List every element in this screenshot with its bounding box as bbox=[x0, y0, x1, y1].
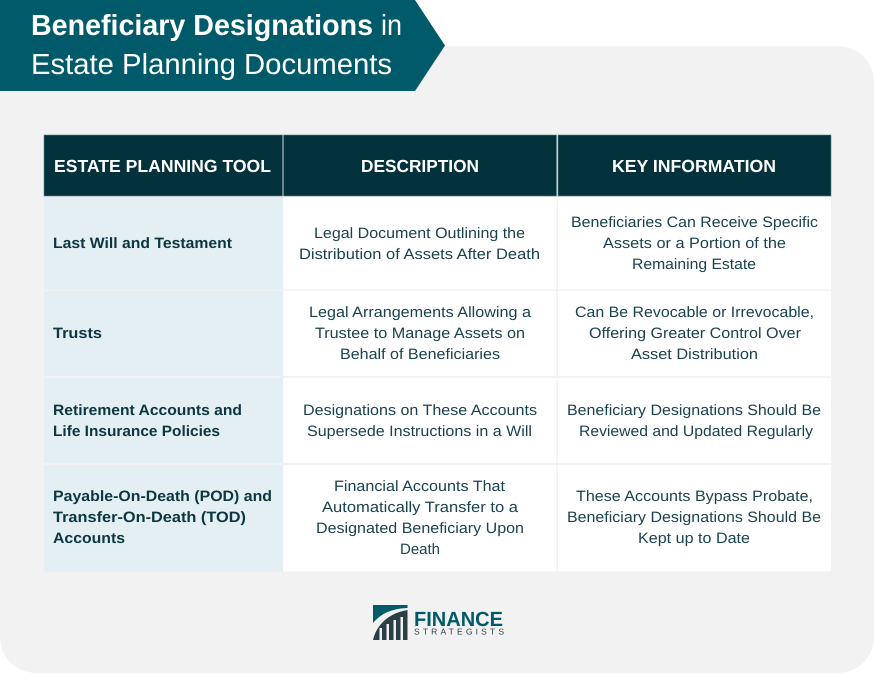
table header row: KEY INFORMATION bbox=[612, 156, 776, 176]
title text: in bbox=[381, 10, 402, 42]
row: Last Will and Testament bbox=[44, 197, 831, 290]
row: Payable-On-Death and Transfer-On-Death Accounts: Payable-On-Death (POD) and bbox=[53, 488, 272, 505]
row: Trusts: Legal Arrangements Allowing a bbox=[309, 304, 532, 321]
row: Last Will and Testament: Legal Document Outlining the bbox=[314, 225, 525, 242]
row: Retirement Accounts and Life Insurance Policies: Beneficiary Designations Should Be bbox=[567, 402, 821, 419]
title banner bbox=[0, 0, 445, 91]
title text: Beneficiary Designations bbox=[31, 10, 373, 42]
row: Payable-On-Death and Transfer-On-Death Accounts: Death bbox=[400, 541, 440, 558]
row: Last Will and Testament: Assets or a Portion of the bbox=[603, 235, 786, 252]
row: Trusts: Offering Greater Control Over bbox=[589, 325, 801, 342]
row: Payable-On-Death and Transfer-On-Death Accounts: Financial Accounts That bbox=[334, 478, 506, 495]
table header row: DESCRIPTION bbox=[361, 156, 479, 176]
row: Retirement Accounts and Life Insurance Policies: Designations on These Accounts bbox=[303, 402, 537, 419]
logo wordmark: FINANCE bbox=[414, 608, 503, 631]
row: Trusts: Trusts bbox=[53, 325, 102, 342]
row: Payable-On-Death and Transfer-On-Death Accounts: Kept up to Date bbox=[638, 530, 750, 547]
row: Retirement Accounts and Life Insurance Policies: Retirement Accounts and bbox=[53, 402, 242, 419]
row: Trusts: Trustee to Manage Assets on bbox=[315, 325, 525, 342]
row: Payable-On-Death and Transfer-On-Death Accounts bbox=[44, 465, 831, 572]
row: Payable-On-Death and Transfer-On-Death Accounts: Beneficiary Designations Should Be bbox=[567, 509, 821, 526]
row: Last Will and Testament: Distribution of Assets After Death bbox=[299, 246, 540, 263]
row: Retirement Accounts and Life Insurance Policies bbox=[44, 378, 831, 463]
row: Retirement Accounts and Life Insurance Policies: Supersede Instructions in a Will bbox=[307, 423, 532, 440]
row: Trusts: Behalf of Beneficiaries bbox=[340, 346, 500, 363]
table header row bbox=[44, 135, 831, 196]
row: Payable-On-Death and Transfer-On-Death Accounts: These Accounts Bypass Probate, bbox=[576, 488, 813, 505]
row: Payable-On-Death and Transfer-On-Death Accounts: Accounts bbox=[53, 530, 125, 547]
row: Payable-On-Death and Transfer-On-Death Accounts: Designated Beneficiary Upon bbox=[316, 520, 524, 537]
row: Retirement Accounts and Life Insurance Policies: Life Insurance Policies bbox=[53, 423, 220, 440]
row: Retirement Accounts and Life Insurance Policies: Reviewed and Updated Regularly bbox=[579, 423, 814, 440]
logo: Finance Strategists bbox=[373, 605, 504, 640]
row: Trusts: Asset Distribution bbox=[631, 346, 758, 363]
table bbox=[44, 135, 831, 572]
icon: logo chart arch bbox=[373, 605, 408, 640]
row: Trusts bbox=[44, 291, 831, 376]
logo: Finance Strategists: STRATEGISTS bbox=[414, 626, 504, 636]
row: Last Will and Testament: Beneficiaries Can Receive Specific bbox=[571, 214, 819, 231]
row: Last Will and Testament: Last Will and Testament bbox=[53, 235, 232, 252]
table header row: ESTATE PLANNING TOOL bbox=[54, 156, 271, 176]
row: Payable-On-Death and Transfer-On-Death Accounts: Automatically Transfer to a bbox=[322, 499, 519, 516]
title text: Estate Planning Documents bbox=[31, 49, 392, 81]
row: Payable-On-Death and Transfer-On-Death Accounts: Transfer-On-Death (TOD) bbox=[53, 509, 246, 526]
title text bbox=[31, 10, 402, 81]
row: Trusts: Can Be Revocable or Irrevocable, bbox=[575, 304, 814, 321]
row: Last Will and Testament: Remaining Estate bbox=[632, 256, 756, 273]
